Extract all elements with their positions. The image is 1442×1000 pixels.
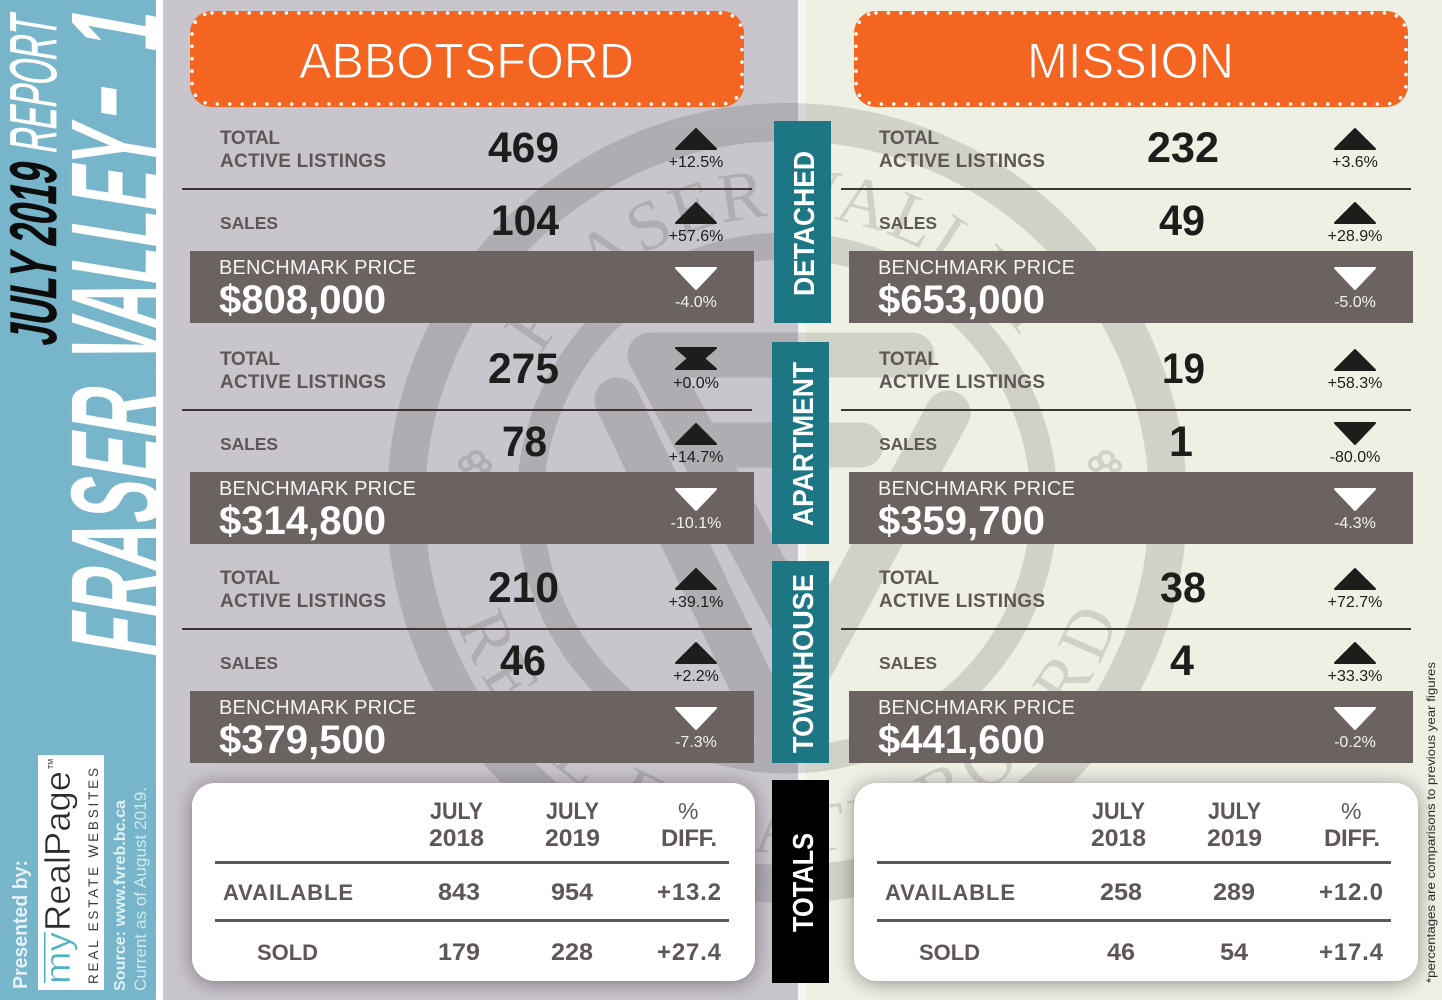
- row: sold: SOLD: [257, 940, 318, 965]
- icon: up arrow: [1335, 569, 1375, 589]
- row: available: 289: [1213, 879, 1255, 906]
- column headers: %: [1341, 798, 1361, 824]
- benchmark price bar: BENCHMARK PRICE: [878, 697, 1075, 719]
- row: sold: SOLD: [919, 940, 980, 965]
- column headers: DIFF.: [1324, 825, 1380, 852]
- row: available: +12.0: [1319, 879, 1383, 906]
- row: sold: 46: [1107, 939, 1135, 966]
- benchmark price bar: BENCHMARK PRICE: [219, 697, 416, 719]
- logo: myRealPage: my: [37, 932, 78, 984]
- row: sold: [257, 939, 722, 966]
- icon: up arrow: [676, 203, 716, 223]
- benchmark price bar: [190, 472, 754, 544]
- row: available: [223, 879, 721, 906]
- benchmark price bar: $653,000: [878, 278, 1045, 322]
- panel: Abbotsford apartment: [182, 345, 754, 544]
- row: sold: [919, 939, 1384, 966]
- tab: Detached: DETACHED: [789, 151, 821, 296]
- column headers: 2019: [1207, 825, 1262, 852]
- panel: Abbotsford background: [163, 0, 798, 1000]
- panel: Abbotsford detached: [182, 124, 754, 323]
- listings change: +3.6%: [1332, 154, 1378, 171]
- benchmark price bar: $441,600: [878, 718, 1045, 762]
- logo: myRealPage: RealPage: [37, 771, 78, 931]
- total active listings label: TOTAL: [220, 128, 280, 149]
- benchmark price bar: $314,800: [219, 499, 386, 543]
- benchmark price bar: -0.2%: [1334, 734, 1376, 751]
- icon: up arrow: [676, 424, 716, 444]
- tab: Townhouse: TOWNHOUSE: [788, 574, 820, 753]
- heading: Abbotsford: [190, 11, 744, 107]
- listings change: +0.0%: [673, 375, 719, 392]
- benchmark price bar: -5.0%: [1334, 294, 1376, 311]
- listings change: +12.5%: [669, 154, 723, 171]
- total active listings label: ACTIVE LISTINGS: [220, 591, 386, 612]
- panel: Mission detached: [841, 124, 1413, 323]
- logo: myRealPage: TM: [48, 759, 55, 769]
- sales value: 104: [491, 197, 559, 245]
- sales change: +2.2%: [673, 668, 719, 685]
- column headers: 2018: [429, 825, 484, 852]
- column headers: JULY: [546, 798, 599, 825]
- icon: up arrow: [1335, 129, 1375, 149]
- total active listings label: ACTIVE LISTINGS: [220, 372, 386, 393]
- listings change: +39.1%: [669, 594, 723, 611]
- benchmark price bar: -4.3%: [1334, 515, 1376, 532]
- listings change: +58.3%: [1328, 375, 1382, 392]
- icon: up arrow: [676, 569, 716, 589]
- watermark: Fraser Valley Real Estate Board seal: REAL ESTATE BOARD: [458, 607, 1112, 852]
- source line: Source: www.fvreb.bc.ca: [112, 800, 129, 991]
- row: available: 258: [1100, 879, 1142, 906]
- active listings value: 232: [1147, 124, 1219, 172]
- column headers: 2018: [1091, 825, 1146, 852]
- sales label: SALES: [879, 653, 937, 673]
- benchmark price bar: -4.0%: [675, 294, 717, 311]
- benchmark price bar: [190, 251, 754, 323]
- sales change: +57.6%: [669, 228, 723, 245]
- total active listings label: ACTIVE LISTINGS: [879, 151, 1045, 172]
- table: Abbotsford totals: [192, 783, 755, 981]
- icon: up arrow: [1335, 643, 1375, 663]
- benchmark price bar: $379,500: [219, 718, 386, 762]
- active listings value: 210: [488, 564, 559, 612]
- tab: Apartment: [772, 342, 829, 544]
- row: available: 843: [438, 879, 480, 906]
- total active listings label: ACTIVE LISTINGS: [879, 372, 1045, 393]
- sales value: 78: [502, 418, 547, 466]
- benchmark price bar: $359,700: [878, 499, 1045, 543]
- watermark: Fraser Valley Real Estate Board seal: FRASER VALLEY: [504, 172, 1022, 353]
- active listings value: 38: [1160, 564, 1206, 612]
- total active listings label: ACTIVE LISTINGS: [879, 591, 1045, 612]
- row: available: AVAILABLE: [223, 880, 353, 905]
- column headers: %: [678, 798, 698, 824]
- column headers: JULY: [430, 798, 483, 825]
- row: available: [885, 879, 1383, 906]
- total active listings label: TOTAL: [220, 568, 280, 589]
- sales value: 46: [500, 637, 546, 685]
- active listings value: 469: [488, 124, 559, 172]
- column headers: [1091, 798, 1380, 852]
- current date line: Current as of August 2019.: [132, 787, 150, 991]
- icon: no change marker: [676, 348, 716, 369]
- sales label: SALES: [879, 213, 937, 233]
- column headers: [429, 798, 717, 852]
- benchmark price bar: -10.1%: [671, 515, 721, 532]
- row: sold: 179: [438, 939, 480, 966]
- total active listings label: ACTIVE LISTINGS: [220, 151, 386, 172]
- tab: Totals: TOTALS: [788, 833, 820, 932]
- presented by label: Presented by:: [10, 860, 32, 989]
- sales value: 1: [1169, 418, 1193, 466]
- panel: Mission apartment: [841, 345, 1413, 544]
- panel: Mission townhouse: [841, 564, 1413, 763]
- watermark: Fraser Valley Real Estate Board seal: [388, 103, 1186, 903]
- row: sold: +27.4: [657, 939, 722, 966]
- panel: Mission background: [806, 0, 1442, 1000]
- benchmark price bar: [190, 691, 754, 763]
- icon: up arrow: [676, 643, 716, 663]
- logo: myRealPage: REAL ESTATE WEBSITES: [86, 768, 101, 984]
- column headers: JULY: [1092, 798, 1145, 825]
- tab: Detached: [774, 121, 831, 323]
- logo: myRealPage: [37, 755, 104, 990]
- tab: Apartment: APARTMENT: [788, 362, 820, 526]
- total active listings label: TOTAL: [879, 568, 939, 589]
- column headers: 2019: [545, 825, 600, 852]
- row: sold: 54: [1220, 939, 1249, 966]
- icon: up arrow: [1335, 203, 1375, 223]
- benchmark price bar: BENCHMARK PRICE: [878, 257, 1075, 279]
- sales change: -80.0%: [1330, 449, 1380, 466]
- sales label: SALES: [879, 434, 937, 454]
- benchmark price bar: [849, 691, 1413, 763]
- total active listings label: TOTAL: [879, 349, 939, 370]
- sales label: SALES: [220, 653, 278, 673]
- benchmark price bar: [849, 251, 1413, 323]
- table: Mission totals: [854, 783, 1418, 981]
- benchmark price bar: BENCHMARK PRICE: [878, 478, 1075, 500]
- sales value: 4: [1170, 637, 1194, 685]
- benchmark price bar: BENCHMARK PRICE: [219, 257, 416, 279]
- sales change: +28.9%: [1328, 228, 1382, 245]
- benchmark price bar: -7.3%: [675, 734, 717, 751]
- sales label: SALES: [220, 213, 278, 233]
- column headers: JULY: [1208, 798, 1261, 825]
- row: available: 954: [551, 879, 594, 906]
- sales value: 49: [1159, 197, 1205, 245]
- benchmark price bar: $808,000: [219, 278, 386, 322]
- footnote: *percentages are comparisons to previous year figures: [1424, 662, 1438, 983]
- heading: Abbotsford: ABBOTSFORD: [299, 33, 634, 89]
- total active listings label: TOTAL: [220, 349, 280, 370]
- sales change: +33.3%: [1328, 668, 1382, 685]
- tab: Totals: [772, 780, 829, 983]
- icon: down arrow: [1335, 423, 1375, 444]
- row: sold: +17.4: [1319, 939, 1384, 966]
- column headers: DIFF.: [661, 825, 717, 852]
- sales change: +14.7%: [669, 449, 723, 466]
- row: available: +13.2: [657, 879, 721, 906]
- benchmark price bar: [849, 472, 1413, 544]
- sidebar title: Fraser Valley - 1: FRASER: [45, 383, 188, 659]
- active listings value: 19: [1162, 345, 1205, 393]
- heading: Mission: [854, 11, 1408, 107]
- panel: sidebar background: [0, 0, 156, 1000]
- tab: Townhouse: [772, 561, 829, 763]
- sidebar title: Fraser Valley - 1: -: [27, 84, 170, 118]
- listings change: +72.7%: [1328, 594, 1382, 611]
- benchmark price bar: BENCHMARK PRICE: [219, 478, 416, 500]
- heading: Mission: MISSION: [1027, 33, 1234, 89]
- sales label: SALES: [220, 434, 278, 454]
- active listings value: 275: [488, 345, 559, 393]
- panel: Abbotsford townhouse: [182, 564, 754, 763]
- row: sold: 228: [551, 939, 593, 966]
- icon: up arrow: [676, 129, 716, 149]
- icon: up arrow: [1335, 350, 1375, 370]
- row: available: AVAILABLE: [885, 880, 1015, 905]
- total active listings label: TOTAL: [879, 128, 939, 149]
